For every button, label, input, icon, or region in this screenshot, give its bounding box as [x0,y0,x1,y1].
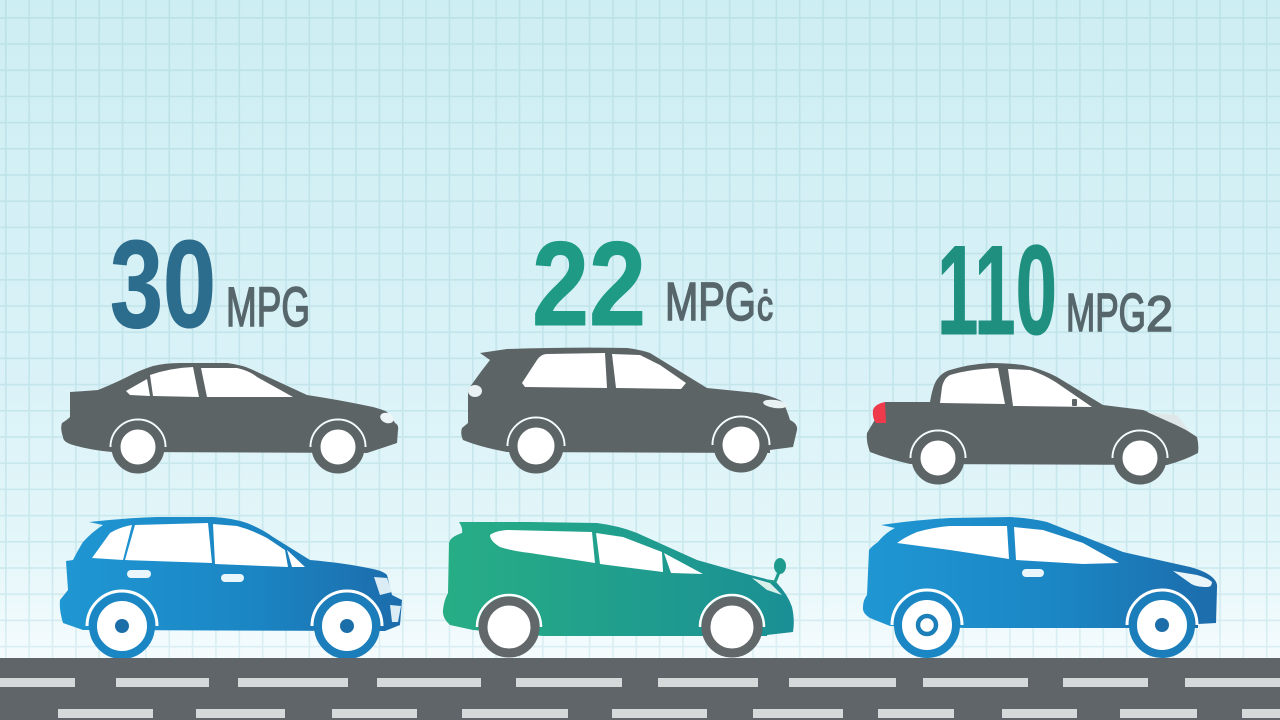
metric: 22 MPG [532,217,773,351]
wheel [1133,596,1191,654]
metric: 22 MPG: ċ [757,282,773,329]
lane markings [0,678,1280,718]
wheel [513,423,559,469]
wheel [1118,436,1162,480]
metric: 110 MPG: 2 [1146,286,1173,342]
wheel [316,425,360,469]
wheel [898,596,956,654]
car: green hatchback [443,522,794,653]
wheel [916,436,960,480]
metric: 22 MPG: 22 [532,217,646,351]
wheel [116,425,160,469]
mirror [768,558,786,582]
wheel [318,597,376,655]
metric: 30 MPG: 30 [110,216,216,354]
car: gray sedan [61,363,398,469]
metric: 30 MPG [110,216,310,354]
wheel [718,422,764,468]
car: gray coupe with red tail light [867,363,1198,480]
wheel [93,597,151,655]
metric: 110 MPG: 110 [937,219,1057,361]
metric: 22 MPG: MPG [665,272,756,332]
metric: 110 MPG: MPG [1066,283,1146,343]
red tail light [873,402,886,423]
car: blue crossover [863,517,1217,654]
car: gray SUV [461,348,797,469]
metric: 30 MPG: MPG [226,275,310,338]
wheel [706,601,758,653]
road [0,658,1280,720]
wheel [483,601,535,653]
car: blue SUV [60,517,402,655]
